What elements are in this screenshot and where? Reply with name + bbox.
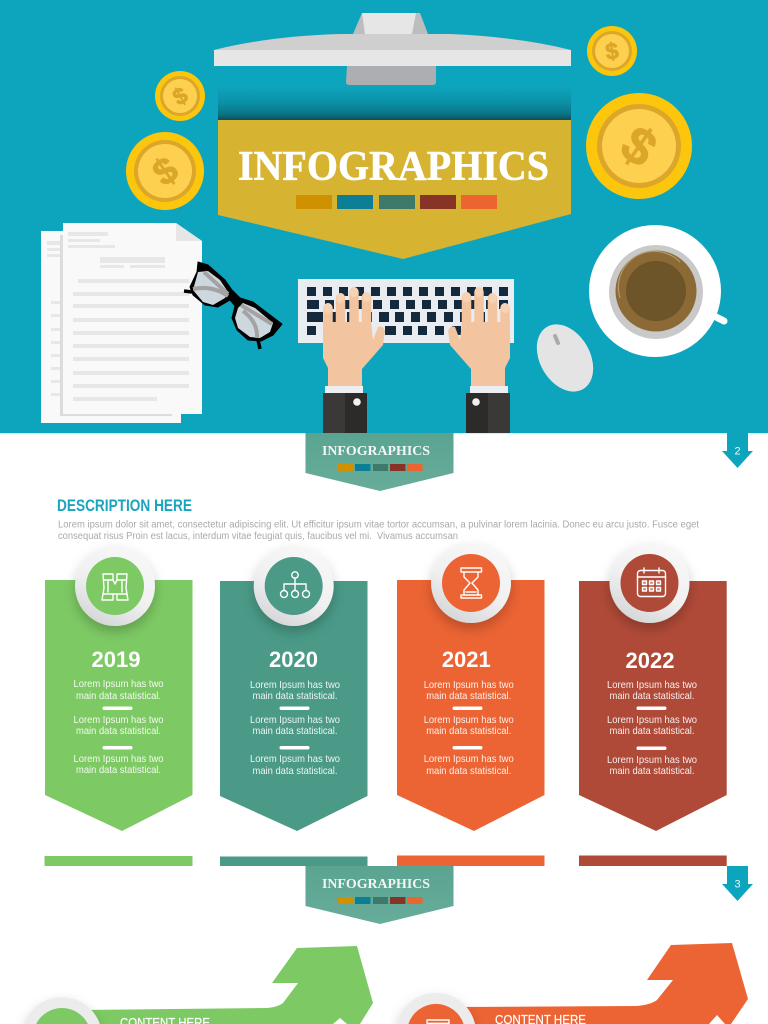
year: 2020 [269,647,318,672]
shirt cuff [470,386,508,393]
statistic lines [607,680,697,777]
page marker arrow 3: 3 [734,878,741,890]
icon: hourglass [461,568,482,598]
banner label: INFOGRAPHICS [322,444,430,459]
arrow panel: orange [397,943,748,1024]
jacket sleeve [323,393,367,433]
statistic lines: Lorem Ipsum has two [424,715,514,726]
icon: binoculars [102,574,128,600]
statistic lines: main data statistical. [610,691,694,702]
statistic lines: main data statistical. [610,766,694,777]
statistic lines: main data statistical. [252,726,338,737]
year: 2022 [626,648,674,673]
statistic lines: Lorem Ipsum has two [250,715,340,726]
statistic lines: main data statistical. [252,766,338,777]
icon: coin small left: $ [168,81,192,110]
colour swatches [296,195,497,209]
year badge [254,546,334,626]
statistic lines: main data statistical. [426,766,511,777]
statistic lines [250,680,340,777]
statistic lines: Lorem Ipsum has two [74,679,164,690]
description text [58,518,699,542]
icon: computer mouse [525,314,605,402]
arrow panel: green [24,946,373,1024]
header background [0,0,768,433]
statistic lines: main data statistical. [252,691,338,702]
icon: coin large left [126,132,204,210]
shirt cuff [325,386,363,393]
icon: left hand [323,291,385,433]
statistic lines: main data statistical. [610,726,694,737]
statistic lines: Lorem Ipsum has two [424,754,514,765]
panel: 2022 [579,543,727,831]
icon: coin large left: $ [145,148,186,194]
year badge [75,546,155,626]
banner swatches [338,897,422,904]
next page colour bars [44,856,727,866]
icon: right hand [448,291,510,433]
title banner [218,120,571,259]
statistic lines: Lorem Ipsum has two [424,680,514,691]
icon: coin small right: $ [604,37,620,65]
title: INFOGRAPHICS [238,144,549,190]
icon: desktop monitor [214,13,571,85]
icon: coin small right [587,26,637,76]
description text: Lorem ipsum dolor sit amet, consectetur adipiscing elit. Ut efficitur ipsum vitae tortor accumsan, a pulvinar lorem lacinia. Donec eu arcu justo. Fusce eget [58,518,699,530]
icon: hierarchy [280,572,310,598]
statistic lines: Lorem Ipsum has two [607,715,697,726]
icon: coffee cup [589,225,724,357]
icon: coin large right [586,93,692,199]
icon: coin small left [155,71,205,121]
statistic lines: Lorem Ipsum has two [74,715,164,726]
statistic lines [424,680,514,777]
jacket sleeve [466,393,510,433]
panel: 2019 [45,546,192,831]
statistic lines: main data statistical. [426,691,511,702]
banner label: INFOGRAPHICS [322,877,430,892]
year: 2019 [92,647,140,672]
content badge [24,997,100,1024]
icon: keyboard [298,279,514,343]
year: 2021 [442,647,491,672]
icon: coin large right: $ [610,115,667,179]
page marker arrow 3 [722,866,753,901]
statistic lines: main data statistical. [76,765,161,776]
statistic lines: Lorem Ipsum has two [250,754,340,765]
icon: hourglass top [427,1020,449,1023]
year badge [610,543,690,623]
panel: 2021 [397,543,544,831]
statistic lines: Lorem Ipsum has two [250,680,340,691]
statistic lines: Lorem Ipsum has two [607,680,697,691]
section banner: page 2 [306,433,454,491]
panel: 2020 [220,546,368,831]
banner swatches [338,464,422,471]
content badge [397,993,475,1024]
page marker arrow 2 [722,433,753,468]
section banner: page 3 [306,866,454,924]
page marker arrow 2: 2 [734,446,741,458]
statistic lines: main data statistical. [76,726,161,737]
monitor screen shadow [218,86,571,120]
statistic lines: main data statistical. [426,726,511,737]
icon: glasses [184,262,282,349]
icon: calendar [638,568,666,596]
statistic lines: Lorem Ipsum has two [74,754,164,765]
description text: consequat risus Proin est lacus, interdum vitae feugiat quis, faucibus vel mi. Vivamus accumsan [58,530,458,542]
statistic lines [74,679,164,776]
heading: description: DESCRIPTION HERE [57,497,192,515]
icon: paper documents [41,223,202,423]
year badge [431,543,511,623]
statistic lines: main data statistical. [76,691,161,702]
statistic lines: Lorem Ipsum has two [607,755,697,766]
